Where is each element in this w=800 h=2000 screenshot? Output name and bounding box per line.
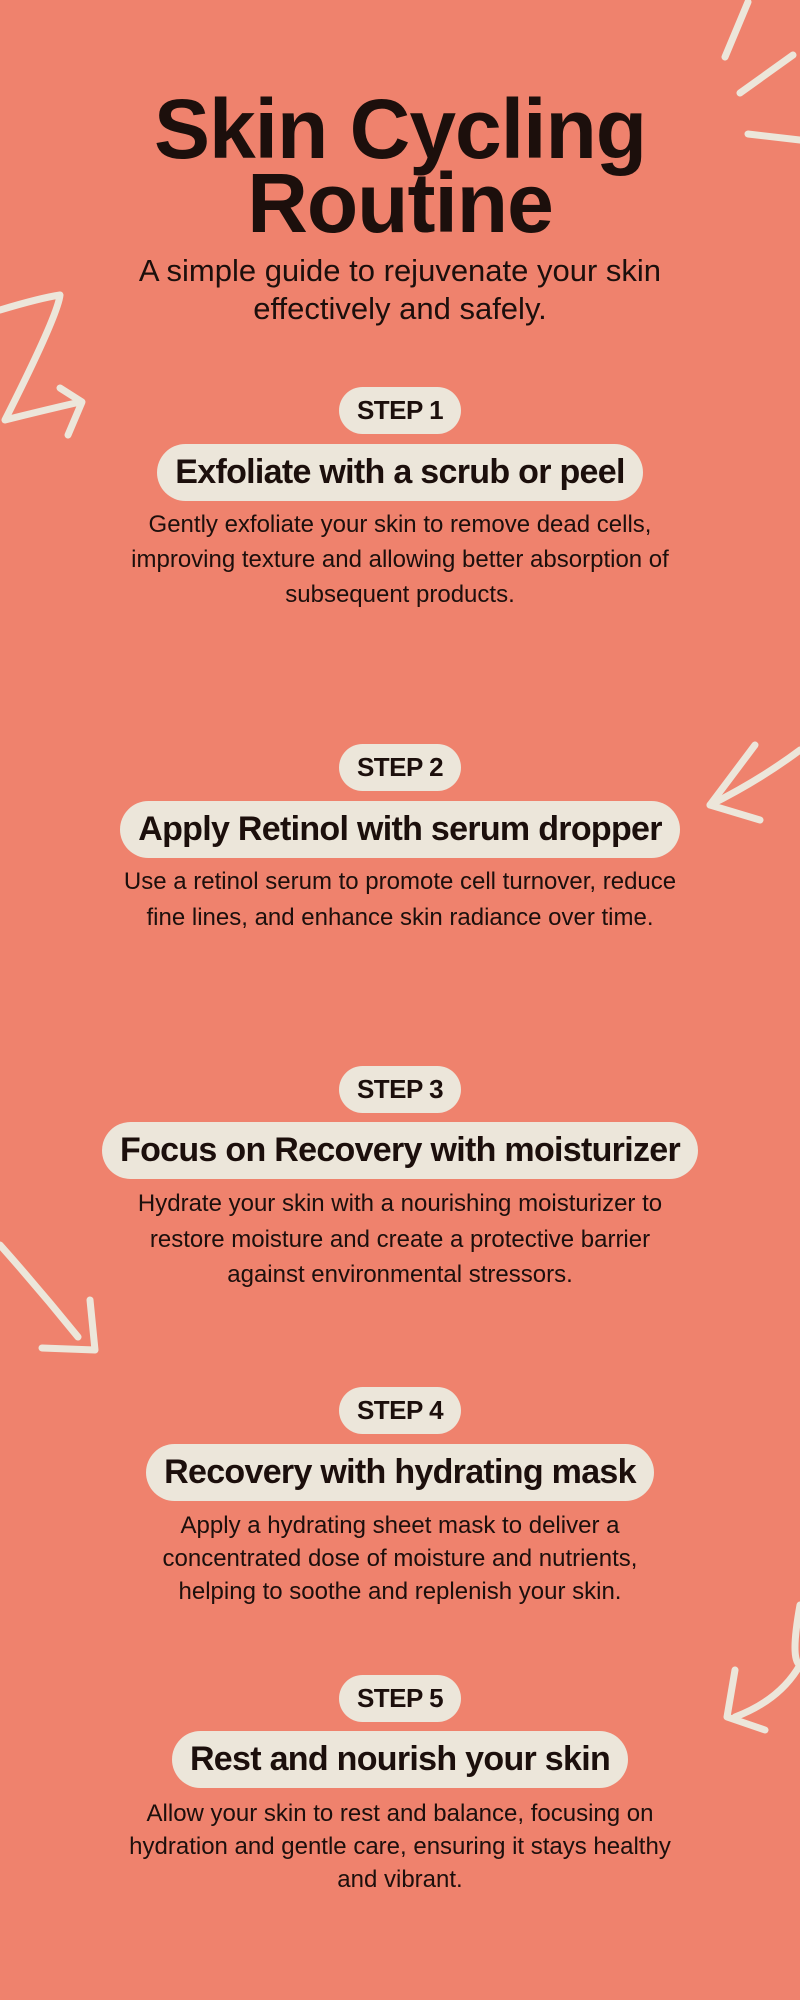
step 4 label: STEP 4 — [357, 1395, 443, 1425]
step 5 text — [129, 1800, 671, 1893]
step 1 heading — [157, 444, 643, 501]
title: Routine — [247, 156, 553, 250]
step 5 text: and vibrant. — [337, 1866, 463, 1893]
step 4 text — [163, 1512, 637, 1605]
step 4 heading — [146, 1444, 654, 1501]
step 3 text: against environmental stressors. — [227, 1261, 573, 1288]
step 2 heading: Apply Retinol with serum dropper — [138, 810, 662, 848]
step 1 label — [339, 387, 461, 434]
step 3 text: restore moisture and create a protective barrier — [150, 1226, 650, 1252]
step 4 — [146, 1387, 654, 1605]
subtitle: effectively and safely. — [253, 291, 547, 326]
step 4 label — [339, 1387, 461, 1434]
step 1 text: Gently exfoliate your skin to remove dead cells, — [149, 511, 651, 538]
step 3 — [102, 1066, 698, 1288]
step 3 heading — [102, 1122, 698, 1179]
step 2 text: fine lines, and enhance skin radiance over time. — [147, 904, 653, 931]
step 1 — [131, 387, 669, 608]
step 4 text: Apply a hydrating sheet mask to deliver a — [181, 1512, 619, 1539]
arrow: left step 3 — [0, 1245, 95, 1350]
step 5 text: Allow your skin to rest and balance, focusing on — [147, 1800, 653, 1827]
step 2 label: STEP 2 — [357, 752, 443, 782]
step 1 text — [131, 511, 669, 608]
title — [154, 82, 646, 250]
step 5 label: STEP 5 — [357, 1683, 443, 1713]
step 1 text: subsequent products. — [285, 581, 515, 608]
step 2 text: Use a retinol serum to promote cell turnover, reduce — [124, 868, 676, 895]
step 2 text — [124, 868, 676, 931]
step 4 heading: Recovery with hydrating mask — [164, 1453, 636, 1491]
step 5 — [129, 1675, 671, 1893]
step 3 text — [138, 1190, 662, 1288]
step 2 heading — [120, 801, 680, 858]
arrow: right step 2 — [710, 745, 800, 820]
title: Skin Cycling — [154, 82, 646, 176]
step 1 text: improving texture and allowing better absorption of — [131, 546, 669, 573]
step 5 heading: Rest and nourish your skin — [190, 1740, 610, 1778]
step 3 label: STEP 3 — [357, 1074, 443, 1104]
arrow: right step 5 — [727, 1605, 800, 1730]
icon: top-right strokes — [725, 2, 800, 140]
step 2 label — [339, 744, 461, 791]
step 5 text: hydration and gentle care, ensuring it stays healthy — [129, 1833, 671, 1860]
step 1 heading: Exfoliate with a scrub or peel — [175, 453, 625, 491]
step 1 label: STEP 1 — [357, 395, 443, 425]
arrow: left zigzag — [0, 295, 82, 435]
step 5 heading — [172, 1731, 628, 1788]
step 3 text: Hydrate your skin with a nourishing moisturizer to — [138, 1190, 662, 1217]
step 4 text: helping to soothe and replenish your skin. — [179, 1578, 621, 1605]
subtitle — [139, 253, 661, 326]
subtitle: A simple guide to rejuvenate your skin — [139, 253, 661, 288]
step 3 label — [339, 1066, 461, 1113]
step 2 — [120, 744, 680, 931]
step 4 text: concentrated dose of moisture and nutrients, — [163, 1545, 637, 1572]
step 3 heading: Focus on Recovery with moisturizer — [120, 1131, 680, 1169]
step 5 label — [339, 1675, 461, 1722]
